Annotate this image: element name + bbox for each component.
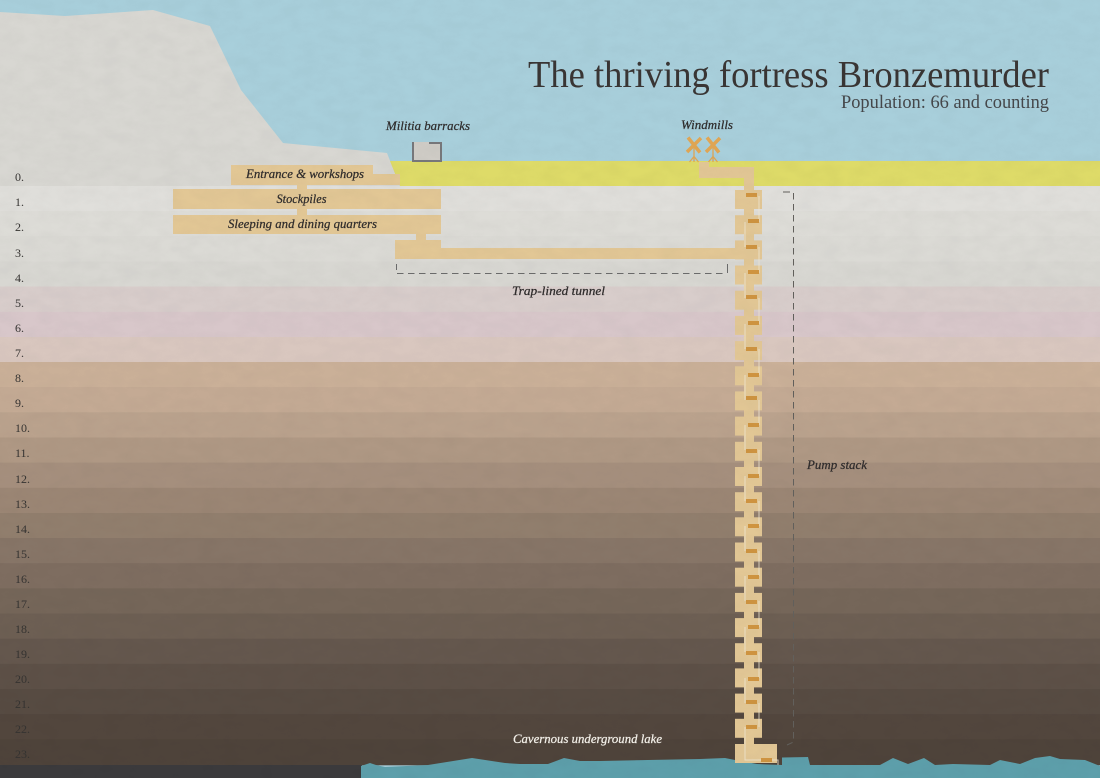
icon: windmills bbox=[687, 138, 720, 162]
label: militia barracks: Militia barracks bbox=[385, 118, 470, 133]
depth scale labels: 12. bbox=[15, 472, 30, 486]
label: entrance and workshops: Entrance & workshops bbox=[245, 166, 364, 181]
depth scale labels: 16. bbox=[15, 572, 30, 586]
windmill shaft connector bbox=[699, 162, 754, 192]
militia barracks icon bbox=[412, 142, 442, 162]
room: stockpiles bbox=[173, 189, 441, 209]
room: entrance and workshops bbox=[231, 165, 400, 185]
underground strata bands bbox=[0, 186, 1100, 765]
depth scale labels: 2. bbox=[15, 220, 24, 234]
label: trap-lined tunnel: Trap-lined tunnel bbox=[512, 283, 605, 298]
depth scale labels: 22. bbox=[15, 722, 30, 736]
depth scale labels: 5. bbox=[15, 296, 24, 310]
bracket: trap-lined tunnel bbox=[396, 264, 728, 274]
label: windmills: Windmills bbox=[681, 117, 733, 132]
fortress rooms bbox=[173, 165, 737, 259]
label: sleeping and dining quarters: Sleeping and dining quarters bbox=[228, 216, 377, 231]
surface grass layer bbox=[390, 161, 1100, 186]
depth scale labels: 18. bbox=[15, 622, 30, 636]
depth scale labels: 21. bbox=[15, 697, 30, 711]
depth scale labels: 14. bbox=[15, 522, 30, 536]
depth scale labels: 1. bbox=[15, 195, 24, 209]
pump stack central shaft bbox=[744, 190, 754, 746]
room: sleeping and dining quarters bbox=[173, 215, 441, 234]
depth scale labels: 10. bbox=[15, 421, 30, 435]
depth scale labels: 23. bbox=[15, 747, 30, 761]
depth scale labels: 0. bbox=[15, 170, 24, 184]
subtitle: Population: 66 and counting bbox=[841, 93, 1049, 113]
sky bbox=[0, 0, 1100, 186]
pump stack blocks bbox=[735, 190, 777, 763]
depth scale labels: 8. bbox=[15, 371, 24, 385]
depth scale labels: 7. bbox=[15, 346, 24, 360]
label: cavernous underground lake: Cavernous underground lake bbox=[513, 731, 662, 746]
connector: stockpiles to quarters bbox=[297, 209, 307, 215]
depth scale labels: 15. bbox=[15, 547, 30, 561]
bracket: pump stack bbox=[783, 192, 794, 745]
depth scale labels: 13. bbox=[15, 497, 30, 511]
depth scale labels bbox=[15, 170, 30, 761]
bedrock strip bbox=[0, 765, 362, 778]
title: The thriving fortress Bronzemurder bbox=[528, 54, 1049, 96]
connector: quarters to tunnel room bbox=[416, 234, 426, 240]
depth scale labels: 9. bbox=[15, 396, 24, 410]
trap-lined tunnel corridor bbox=[441, 248, 737, 259]
depth scale labels: 6. bbox=[15, 321, 24, 335]
depth scale labels: 17. bbox=[15, 597, 30, 611]
depth scale labels: 11. bbox=[15, 446, 30, 460]
label: stockpiles: Stockpiles bbox=[276, 191, 326, 206]
icon: left windmill bbox=[687, 138, 701, 162]
label: pump stack: Pump stack bbox=[806, 457, 867, 472]
pump units bbox=[746, 193, 772, 762]
room: tunnel antechamber bbox=[395, 240, 441, 259]
cliff: surface rock bbox=[0, 10, 400, 186]
depth scale labels: 3. bbox=[15, 246, 24, 260]
icon: right windmill bbox=[706, 138, 720, 162]
depth scale labels: 4. bbox=[15, 271, 24, 285]
pump stack bbox=[735, 190, 778, 765]
pump water pipe bbox=[745, 196, 778, 765]
underground lake bbox=[361, 756, 1100, 778]
connector: entrance to stockpiles bbox=[297, 185, 307, 190]
depth scale labels: 20. bbox=[15, 672, 30, 686]
depth scale labels: 19. bbox=[15, 647, 30, 661]
